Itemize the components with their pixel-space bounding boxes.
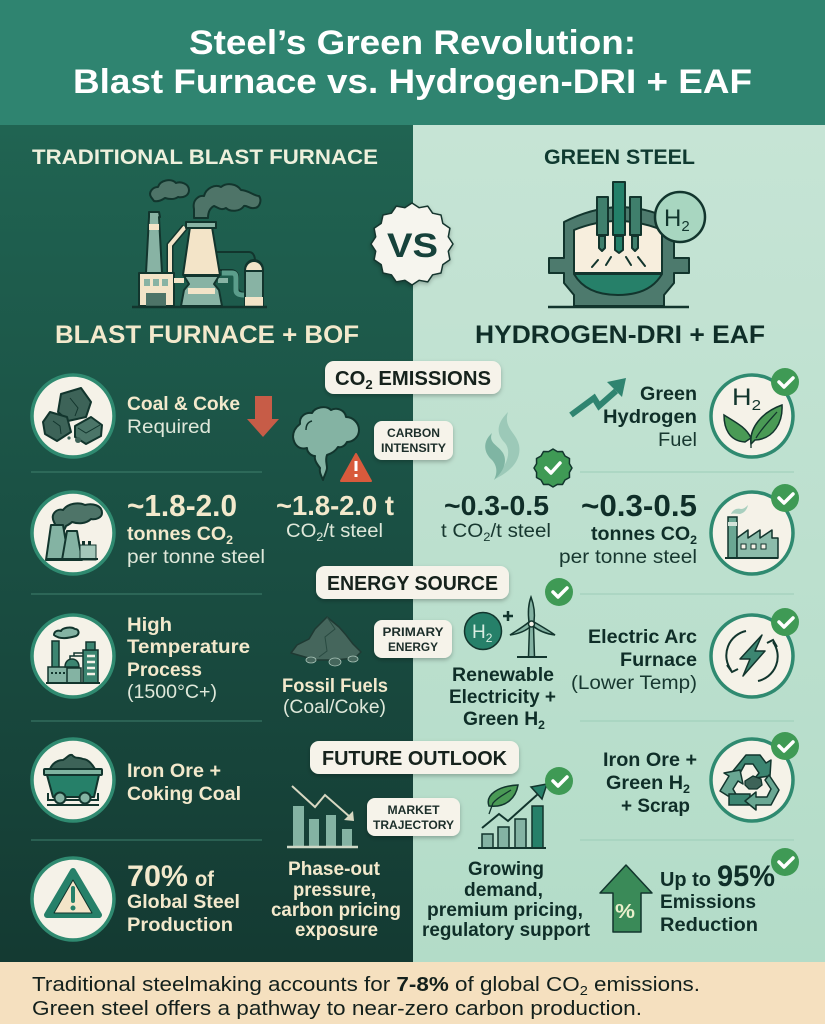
text: iron ore and coking coal [127,761,241,805]
text: electric arc furnace: Electric Arc [588,627,697,648]
text: carbon figure traditional: ~1.8-2.0 t [276,490,394,521]
icon: electric arc furnace with hydrogen: H [664,205,681,232]
check: renewable energy [545,578,573,606]
heading: blast furnace + BOF: BLAST FURNACE + BOF [55,321,359,349]
text: growing demand: Growing [468,859,544,880]
text: high temperature process [127,615,250,703]
icon: hydrogen plus wind turbine: 2 [486,631,493,645]
icon: lightning cycle [711,615,793,697]
text: growing demand: premium pricing, [427,900,583,921]
icon: blast furnace plant [132,180,267,307]
pill: market trajectory [367,798,460,836]
text: carbon figure traditional: CO [286,521,314,542]
pill: future outlook [310,741,519,774]
text: renewable electricity [449,665,556,732]
text: carbon figure green: 2 [483,530,491,544]
text: tonnes CO2 per tonne steel: per tonne steel [559,547,697,568]
left row: tonnes CO2 [32,488,265,574]
text: renewable electricity: Electricity + [449,687,556,708]
check badge [771,368,799,396]
text: 70 percent of global steel production [127,860,240,936]
title [73,24,752,101]
text: green hydrogen fuel: Hydrogen [603,407,697,428]
text: tonnes CO2 per tonne steel [127,488,265,568]
footer text: emissions. [588,974,700,996]
icon: recycling with ore [711,739,793,821]
VS badge [371,203,453,285]
pill: CO2 emissions [325,361,501,394]
text: up to 95 percent emissions reduction: Up to [660,869,711,891]
pill: carbon intensity: CARBON [387,426,440,440]
title: Blast Furnace vs. Hydrogen-DRI + EAF [73,63,752,101]
text: iron ore green H2 scrap: + Scrap [621,796,690,817]
pill: primary energy: ENERGY [388,640,438,654]
left row: coal and coke [32,375,240,457]
text: coal and coke required: Required [127,417,211,438]
text: phase-out pressure: carbon pricing [271,900,401,921]
text: coal and coke required: Coal & Coke [127,394,240,415]
pill: carbon intensity: INTENSITY [381,441,446,455]
text: carbon figure green: ~0.3-0.5 [444,490,549,521]
text: iron ore green H2 scrap: 2 [683,782,690,796]
text: growing demand: demand, [464,880,543,901]
text: tonnes CO2 per tonne steel: tonnes CO [591,524,687,545]
icon: electric arc furnace with hydrogen: 2 [681,218,690,235]
chart: growing bars with leaf [478,784,547,848]
check badge [771,732,799,760]
text: green hydrogen fuel [603,384,697,451]
pill: market trajectory: MARKET [388,803,440,817]
footer text: Green steel offers a pathway to near-zero carbon production. [32,998,642,1020]
text: high temperature process: High [127,615,172,636]
pill: energy source [316,566,509,599]
pill: CO2 emissions: EMISSIONS [373,368,491,390]
pill: energy source: ENERGY SOURCE [327,573,498,595]
icon: coal pile [291,617,361,666]
arrow: down red [247,396,279,437]
check badge [771,848,799,876]
icon: hydrogen plus wind turbine [464,597,555,657]
icon: hydrogen leaves: 2 [752,397,761,414]
text: electric arc furnace [571,627,697,694]
pill: future outlook: FUTURE OUTLOOK [322,748,508,770]
text: fossil fuels [282,676,388,718]
footer text [32,974,700,1020]
text: tonnes CO2 per tonne steel: per tonne steel [127,547,265,568]
text: 70 percent of global steel production: Global Steel [127,892,240,913]
pill: CO2 emissions: CO [335,368,365,390]
chart: declining bars with arrow [287,786,358,847]
arrow: up with percent [600,865,652,932]
text: tonnes CO2 per tonne steel: 2 [226,533,233,547]
right row: green hydrogen [603,368,799,457]
heading: hydrogen-DRI + EAF: HYDROGEN-DRI + EAF [475,321,765,349]
left row: market share [32,858,240,940]
footer text: 2 [580,983,588,998]
text: phase-out pressure: exposure [295,920,378,941]
icon: industrial plant [32,615,114,697]
text: 70 percent of global steel production: Production [127,915,233,936]
text: green hydrogen fuel: Fuel [658,430,697,451]
text: fossil fuels: (Coal/Coke) [283,697,386,718]
icon: hydrogen leaves: H [732,384,749,411]
text: iron ore green H2 scrap: Green H [606,773,680,794]
text: carbon figure green [441,490,551,544]
text: coal and coke required [127,394,240,438]
right row: iron ore, green hydrogen, scrap [603,732,799,821]
text: tonnes CO2 per tonne steel: tonnes CO [127,524,223,545]
text: tonnes CO2 per tonne steel: ~1.8-2.0 [127,488,237,523]
icon: hydrogen plus wind turbine: H [472,622,486,643]
heading: traditional blast furnace: TRADITIONAL BLAST FURNACE [32,146,378,169]
text: iron ore green H2 scrap: Iron Ore + [603,750,697,771]
text: carbon figure green: t CO [441,521,480,542]
pill: market trajectory: TRAJECTORY [373,818,454,832]
icon: clean vapour wisps [485,412,519,480]
right row: electric arc furnace [571,608,799,697]
check: growing demand [545,767,573,795]
text: tonnes CO2 per tonne steel: 2 [690,533,697,547]
text: electric arc furnace: Furnace [620,650,697,671]
text: growing demand: regulatory support [422,920,591,941]
icon: electric arc furnace with hydrogen [548,182,705,307]
icon: cooling towers with smoke [32,492,114,574]
text: growing demand [422,859,591,941]
text: iron ore green H2 scrap [603,750,697,817]
pill: carbon intensity [374,421,453,460]
text: green hydrogen fuel: Green [640,384,697,405]
arrow: rising zigzag teal [571,378,626,415]
text: electric arc furnace: (Lower Temp) [571,673,697,694]
text: renewable electricity: Green H [463,709,537,730]
check badge [771,484,799,512]
text: iron ore and coking coal: Iron Ore + [127,761,221,782]
text: tonnes CO2 per tonne steel: ~0.3-0.5 [581,488,697,523]
icon: clean factory [711,492,793,574]
footer text: Traditional steelmaking accounts for 7-8% of global CO [32,974,566,996]
text: up to 95 percent emissions reduction [660,860,775,936]
text: tonnes CO2 per tonne steel [559,488,697,568]
text: up to 95 percent emissions reduction: 95% [717,860,775,893]
header banner [0,0,825,125]
panel: traditional blast furnace background [0,124,413,962]
title: Steel’s Green Revolution: [189,24,636,62]
VS badge: VS [387,227,438,265]
text: high temperature process: Temperature [127,637,250,658]
text: iron ore and coking coal: Coking Coal [127,784,241,805]
icon: green badge check [534,449,572,487]
icon: emissions cloud with warning [293,407,371,481]
pill: primary energy [374,620,452,658]
text: phase-out pressure: pressure, [293,880,376,901]
text: renewable electricity: 2 [538,718,545,732]
text: up to 95 percent emissions reduction: Reduction [660,915,758,936]
text: phase-out pressure: Phase-out [288,859,381,880]
icon: warning triangle [32,858,114,940]
icon: hydrogen leaves [711,375,793,457]
left row: iron ore and coking coal [32,739,241,821]
text: up to 95 percent emissions reduction: Emissions [660,892,756,913]
icon: mine cart [32,739,114,821]
pill: primary energy: PRIMARY [382,625,444,639]
panel: green steel background [413,124,825,962]
left row: high temperature process [32,615,250,703]
divider rule group [31,472,794,840]
text: carbon figure traditional: 2 [316,530,324,544]
footer band [0,962,825,1024]
text: 70 percent of global steel production: of [195,868,215,891]
text: carbon figure traditional: /t steel [323,521,383,542]
text: high temperature process: (1500°C+) [127,682,217,703]
text: high temperature process: Process [127,660,202,681]
text: phase-out pressure [271,859,401,941]
pill: CO2 emissions: 2 [365,377,373,392]
check badge [771,608,799,636]
text: renewable electricity: Renewable [452,665,554,686]
text: fossil fuels: Fossil Fuels [282,676,388,697]
heading: green steel: GREEN STEEL [544,146,695,169]
text: carbon figure traditional [276,490,394,544]
text: 70 percent of global steel production: 70% [127,860,188,893]
icon: coal lumps [32,375,114,457]
right row: low emissions [559,484,799,574]
text: carbon figure green: /t steel [490,521,551,542]
arrow: up with percent: % [615,901,635,923]
